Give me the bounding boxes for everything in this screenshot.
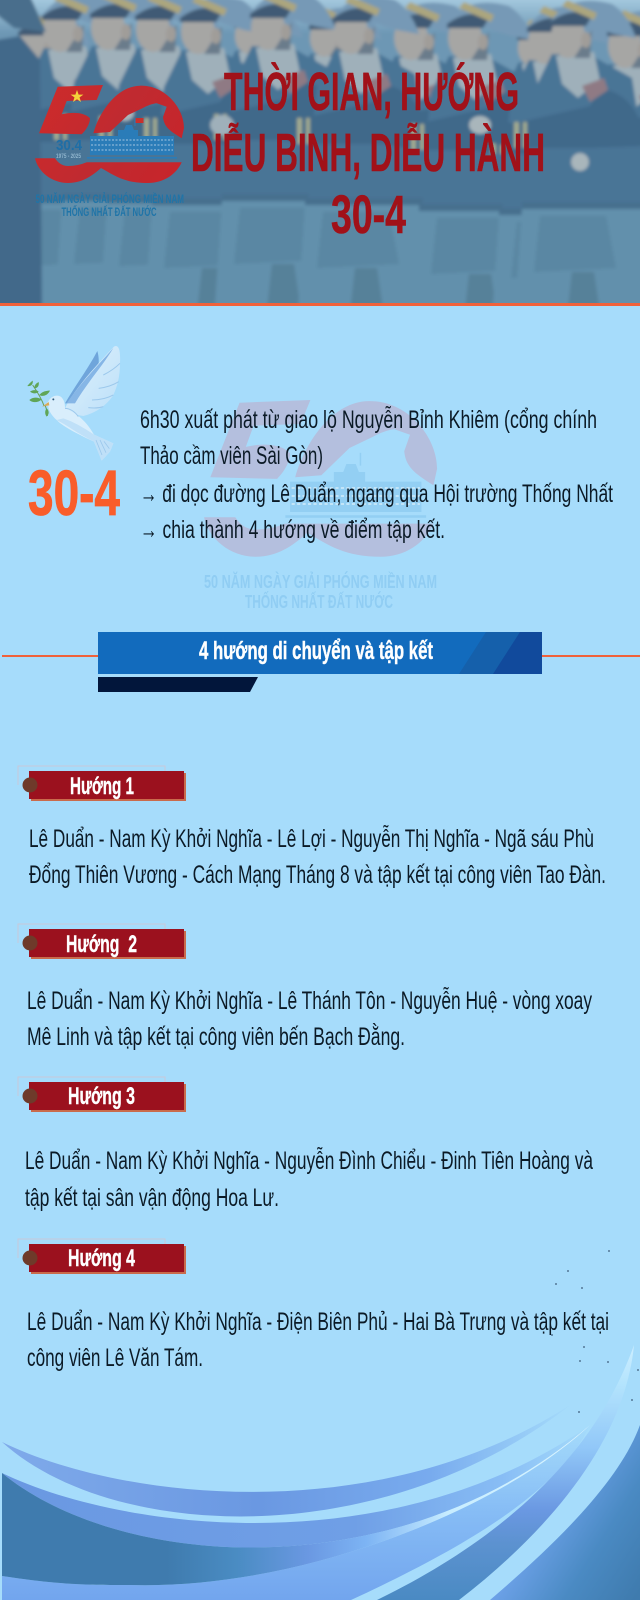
intro text: Thảo cầm viên Sài Gòn) (140, 442, 323, 470)
direction 2: Hướng 2 (66, 931, 137, 958)
watermark caption: 50 NĂM NGÀY GIẢI PHÓNG MIỀN NAM (204, 571, 437, 592)
icon: dove with olive branch (27, 346, 120, 461)
logo building (87, 118, 177, 159)
direction 3 route: tập kết tại sân vận động Hoa Lư. (25, 1184, 279, 1212)
direction 3 route (25, 1146, 593, 1212)
logo caption: THỐNG NHẤT ĐẤT NƯỚC (62, 204, 157, 219)
logo caption (36, 191, 184, 219)
decorative sparkles (551, 1250, 639, 1413)
direction 4 (18, 1239, 609, 1372)
watermark caption: THỐNG NHẤT ĐẤT NƯỚC (245, 591, 393, 612)
intro text (140, 405, 613, 544)
watermark caption (204, 571, 437, 612)
direction 2 route (27, 986, 592, 1051)
intro text: → chia thành 4 hướng về điểm tập kết. (140, 516, 445, 544)
title (191, 62, 545, 245)
logo years: 1975 - 2025 (56, 154, 82, 160)
header photo: marching soldiers (0, 0, 640, 336)
anniversary logo (35, 85, 184, 183)
direction 4: Hướng 4 (68, 1245, 135, 1272)
banner heading: 4 hướng di chuyển và tập kết (199, 637, 433, 665)
logo caption: 50 NĂM NGÀY GIẢI PHÓNG MIỀN NAM (36, 191, 184, 206)
title: 30-4 (331, 185, 406, 245)
direction 3: Hướng 3 (68, 1083, 135, 1110)
direction 3 (18, 1077, 593, 1212)
direction 4 route (27, 1308, 609, 1372)
logo date: 30.4 (56, 137, 83, 154)
section banner (2, 632, 640, 692)
direction 1: Hướng 1 (70, 773, 134, 800)
direction 4 route: công viên Lê Văn Tám. (27, 1344, 203, 1372)
date label 30-4: 30-4 (28, 457, 120, 529)
logo flag (136, 118, 144, 123)
direction 1 route (29, 824, 606, 889)
sleeve hands (469, 116, 491, 134)
logo star (71, 90, 83, 102)
direction 1 (18, 766, 606, 889)
direction 2 route: Mê Linh và tập kết tại công viên bến Bạch Đằng. (27, 1022, 405, 1051)
bottom wave decoration (2, 1345, 640, 1600)
header bottom rule (0, 303, 640, 306)
watermark logo (204, 400, 437, 612)
direction 2 (18, 924, 592, 1051)
